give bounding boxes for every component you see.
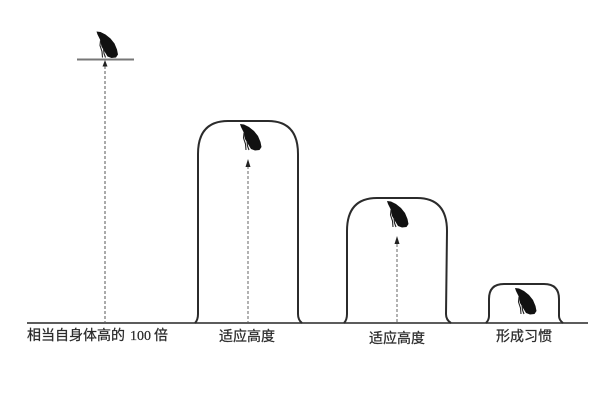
ground line	[27, 322, 588, 324]
small jar outline	[486, 284, 563, 323]
icon: flea under medium jar lid	[387, 201, 408, 228]
icon: flea inside small jar	[515, 288, 536, 314]
icon: flea on bar	[96, 32, 118, 58]
label: 100 times body height: 100	[130, 329, 151, 344]
height bar	[77, 58, 134, 60]
label: adapted height 2: 适应高度	[369, 330, 425, 346]
panel: medium jar	[344, 198, 451, 323]
label: habit formed: 形成习惯	[496, 328, 552, 344]
label: 100 times body height: 相当自身体高的	[27, 327, 125, 343]
icon: flea under tall jar lid	[240, 124, 262, 150]
panel: free jump, 100 times body height	[77, 32, 134, 322]
panel: small jar	[486, 284, 563, 323]
tall jar outline	[195, 121, 302, 323]
label: 100 times body height: 倍	[154, 327, 168, 343]
arrow: adapted height in medium jar	[394, 236, 400, 322]
arrow: adapted height in tall jar	[246, 159, 250, 322]
arrow: jump height	[102, 60, 108, 322]
medium jar outline	[344, 198, 451, 323]
label: adapted height 1: 适应高度	[219, 328, 275, 344]
panel: tall jar	[195, 121, 302, 323]
